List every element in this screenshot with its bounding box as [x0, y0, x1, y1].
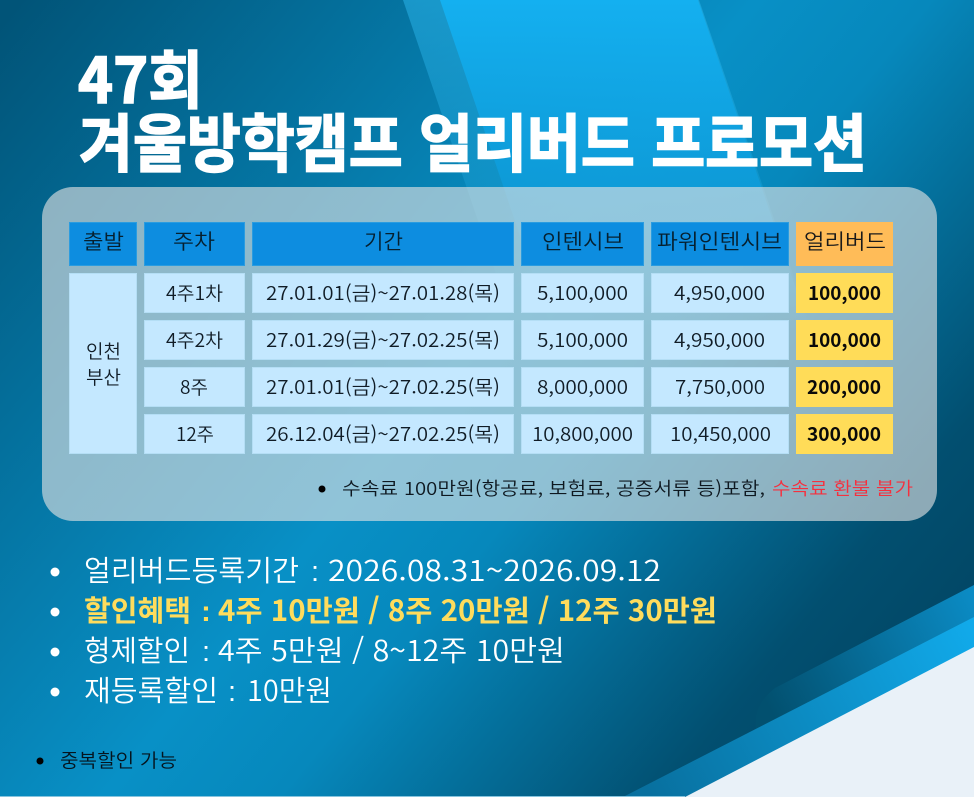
bullet list: discounts: 4주 5만원 / 8~12주 10만원 [218, 628, 565, 670]
row: 12주: 300,000 [807, 420, 881, 447]
row: 8주: 200,000 [807, 373, 881, 400]
row: 8주 [144, 367, 893, 407]
bullet list: discounts: 할인혜택 [84, 588, 191, 630]
row: 4주1차: 5,100,000 [537, 279, 628, 306]
row: 4주1차: 27.01.01(금)~27.01.28(목) [266, 279, 500, 306]
departure cell [70, 274, 136, 454]
row: 8주: 27.01.01(금)~27.02.25(목) [266, 373, 500, 400]
table header row: 얼리버드 [804, 226, 886, 256]
row: 4주2차: 100,000 [808, 326, 881, 353]
panel: pricing table [42, 187, 937, 521]
bullet list: discounts: 형제할인 [84, 628, 190, 670]
table header row: 기간 [364, 226, 403, 256]
departure cell: 부산 [86, 363, 121, 390]
table header row: 출발 [83, 226, 124, 256]
bullet list: discounts: : [228, 676, 236, 708]
table header row [70, 222, 893, 266]
row: 4주2차: 5,100,000 [537, 326, 628, 353]
row: 4주1차: 4,950,000 [674, 279, 765, 306]
table footnote: 수속료 환불 불가 [772, 475, 913, 501]
bullet list: discounts: 재등록할인 [84, 668, 218, 710]
title [78, 31, 867, 186]
table footnote [318, 475, 913, 501]
bullet list: discounts: 4주 10만원 / 8주 20만원 / 12주 30만원 [218, 588, 717, 630]
table header row: 주차 [173, 226, 215, 256]
bullet list: discounts: 얼리버드등록기간 [84, 548, 299, 590]
row: 4주1차: 100,000 [808, 279, 881, 306]
bottom-right diagonal bands [0, 585, 974, 797]
row: 12주 [144, 414, 893, 454]
row: 12주: 26.12.04(금)~27.02.25(목) [266, 420, 500, 447]
title: 겨울방학캠프 얼리버드 프로모션 [79, 94, 867, 186]
row: 4주2차: 27.01.29(금)~27.02.25(목) [266, 326, 500, 353]
table header row: 인텐시브 [542, 226, 624, 256]
table footnote: 수속료 100만원(항공료, 보험료, 공증서류 등)포함, [342, 475, 765, 501]
row: 8주: 7,750,000 [675, 373, 765, 400]
row: 12주: 10,800,000 [532, 420, 633, 447]
row: 4주2차: 4,950,000 [674, 326, 765, 353]
row: 4주1차 [144, 273, 893, 313]
bullet list: discounts: : [202, 636, 210, 668]
row: 8주: 8,000,000 [537, 373, 628, 400]
departure cell: 인천 [86, 337, 121, 364]
bullet list: discounts [50, 548, 717, 710]
row: 4주1차: 4주1차 [166, 279, 223, 306]
bullet list: discounts: 10만원 [247, 668, 332, 710]
bullet list: discounts: 2026.08.31~2026.09.12 [328, 548, 661, 590]
row: 4주2차: 4주2차 [166, 326, 223, 353]
table header row: 파워인텐시브 [657, 226, 782, 256]
row: 8주: 8주 [180, 373, 208, 400]
bullet list: discounts: : [201, 596, 211, 628]
bullet list: discounts: : [311, 556, 319, 588]
duplicate discount note: 중복할인 가능 [60, 746, 177, 773]
row: 12주: 10,450,000 [670, 420, 771, 447]
row: 12주: 12주 [176, 420, 214, 447]
row: 4주2차 [144, 320, 893, 360]
decorative light streak [403, 0, 812, 330]
title: 47회 [78, 31, 203, 122]
